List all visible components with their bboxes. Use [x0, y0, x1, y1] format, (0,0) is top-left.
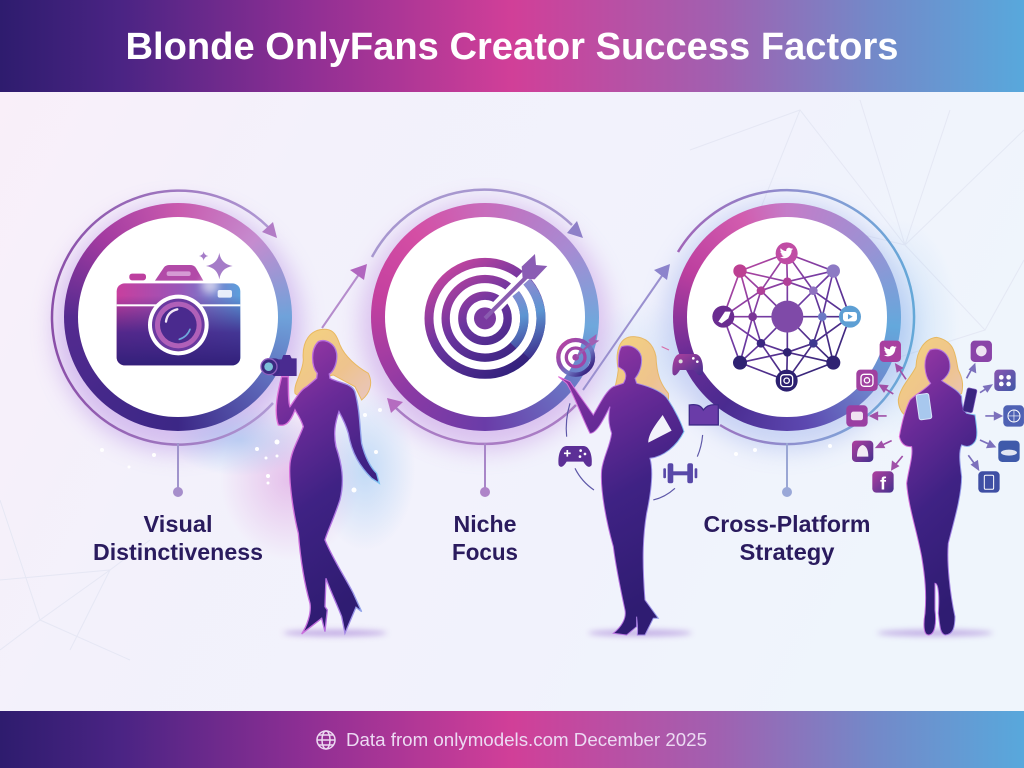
- background glows: [54, 202, 960, 560]
- social: twitter: [880, 341, 901, 362]
- node: video: [839, 306, 861, 328]
- arrow: niche to cross-platform: [583, 264, 670, 390]
- icon: network: [712, 242, 861, 392]
- footer bar: [0, 711, 1024, 768]
- icon: target: [429, 254, 547, 374]
- outer arrow arc: [52, 191, 277, 445]
- social: phone: [978, 471, 1000, 493]
- spread arrows: [871, 365, 906, 469]
- sparkles: [100, 408, 832, 492]
- ring and white disc: [673, 203, 901, 431]
- figure: creator with camera: [261, 329, 379, 634]
- panel: visual distinctiveness: [52, 191, 292, 565]
- node: left app: [712, 306, 734, 328]
- label: Niche: [454, 511, 516, 537]
- icon: controller left: [558, 446, 592, 467]
- floor shadows: [283, 630, 993, 636]
- connector stem: [480, 443, 490, 497]
- icon: camera: [117, 251, 240, 365]
- label: Strategy: [740, 539, 835, 565]
- ring and white disc: [64, 203, 292, 431]
- icon: dumbbell: [663, 463, 697, 483]
- small camera: [261, 355, 297, 376]
- icon: globe: [317, 731, 335, 749]
- figure: creator with phones: [846, 337, 1024, 635]
- icon: sparkles: [199, 251, 233, 279]
- icon: book: [689, 405, 718, 425]
- label: [93, 511, 263, 565]
- panel: cross-platform strategy: [673, 190, 914, 565]
- silhouette: [276, 341, 379, 634]
- dashed orbit: [566, 347, 703, 500]
- label: [704, 511, 870, 565]
- social: cloud: [998, 441, 1020, 462]
- social: grid: [994, 370, 1016, 391]
- social: facebook: f: [880, 474, 887, 494]
- phones: [916, 388, 977, 420]
- outer arrow arcs: [372, 190, 583, 444]
- decorative geometric lines: [0, 100, 1024, 660]
- hair: [615, 337, 669, 423]
- social: bell left: [852, 441, 873, 462]
- connector stem: [173, 443, 183, 497]
- node: twitter: [776, 242, 798, 264]
- social: bell right: [971, 341, 992, 362]
- icon: controller right: [672, 354, 703, 375]
- label: [452, 511, 518, 565]
- social: chat: [846, 405, 868, 427]
- label: Visual: [144, 511, 212, 537]
- silhouette: [899, 349, 977, 635]
- figure: creator with niche icons: [558, 334, 718, 635]
- ring and white disc: [371, 203, 599, 431]
- source note: Data from onlymodels.com December 2025: [346, 729, 707, 750]
- title: Blonde OnlyFans Creator Success Factors: [126, 26, 898, 68]
- hair: [295, 329, 371, 400]
- hair: [898, 337, 963, 415]
- label: Focus: [452, 539, 518, 565]
- outer arrow arc: [678, 190, 914, 444]
- label: Cross-Platform: [704, 511, 870, 537]
- social: instagram: [856, 370, 878, 391]
- panel: niche focus: [371, 190, 599, 565]
- social: facebook: [872, 471, 894, 494]
- connector stem: [782, 443, 792, 497]
- label: Distinctiveness: [93, 539, 263, 565]
- icon: small target: [558, 334, 599, 375]
- node: instagram: [776, 370, 798, 392]
- silhouette: [558, 346, 684, 635]
- arrow: visual to niche: [322, 264, 367, 328]
- social: web: [1003, 405, 1024, 427]
- arm gap: [648, 415, 672, 443]
- header bar: [0, 0, 1024, 92]
